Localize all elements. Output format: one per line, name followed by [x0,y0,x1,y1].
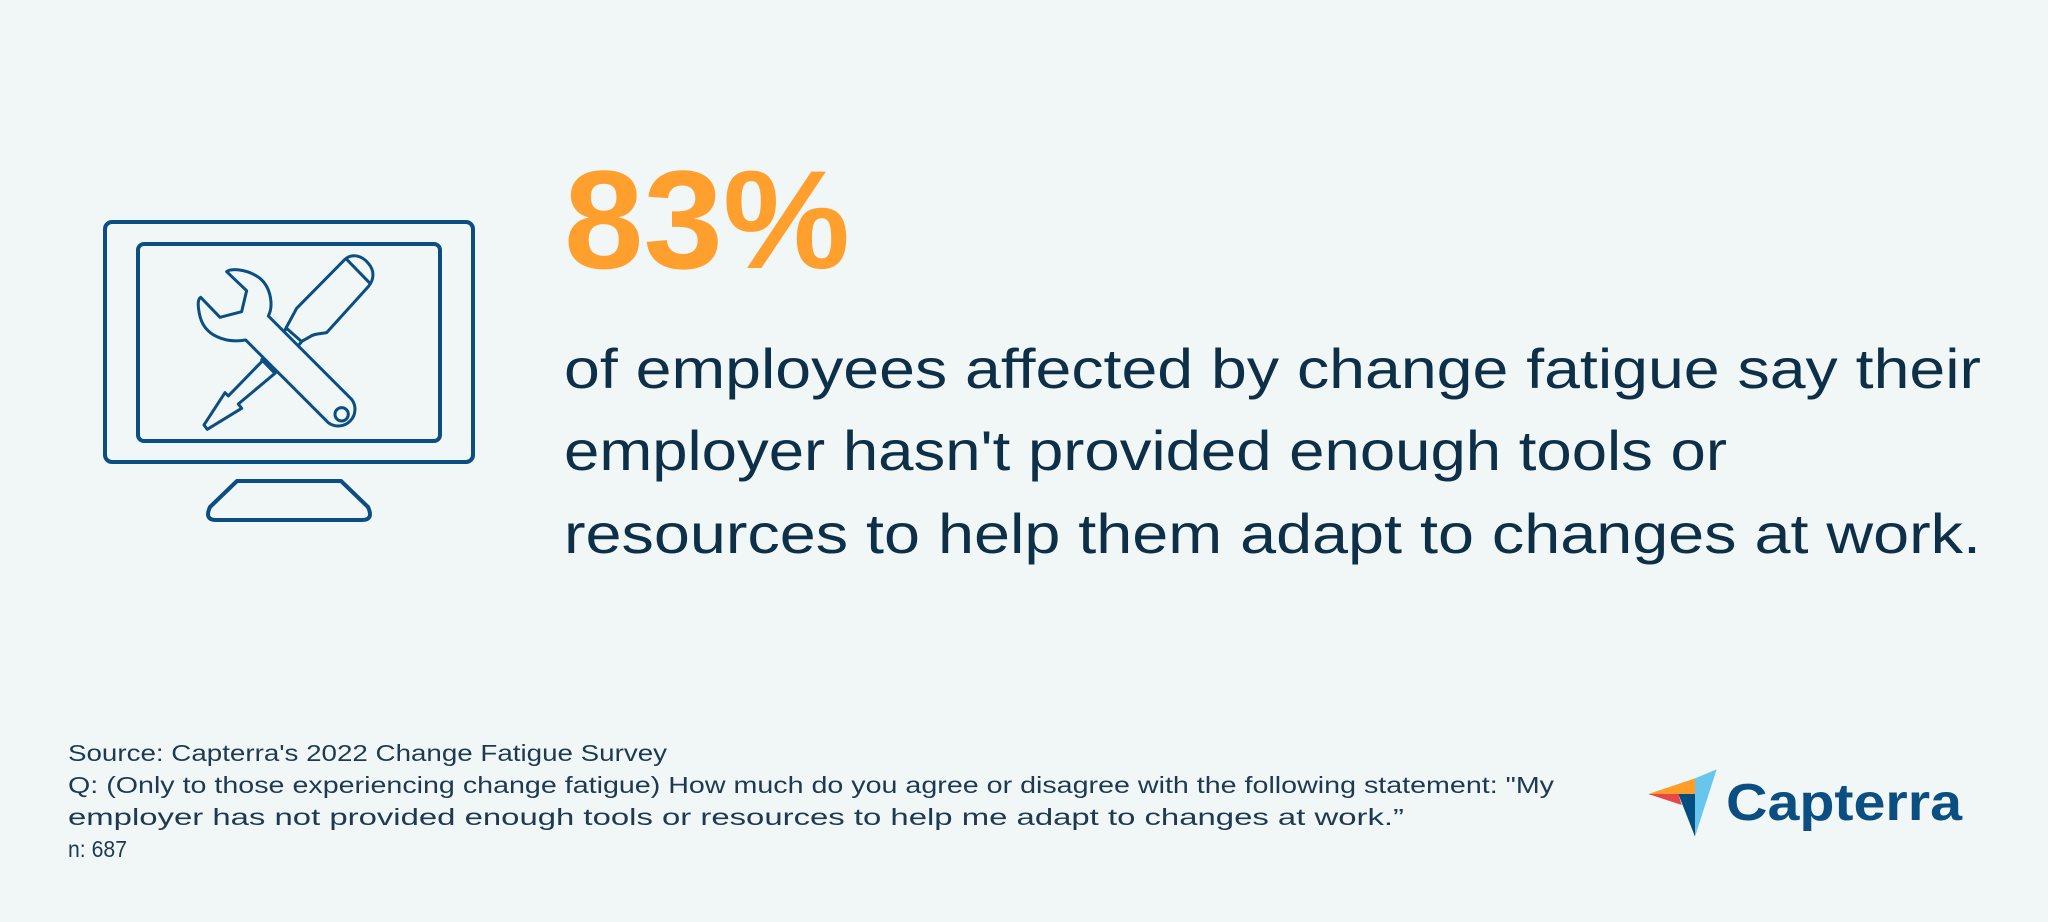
monitor stand [208,481,370,520]
source notes: Q: (Only to those experiencing change fatigue) How much do you agree or disagree with the following statement: "My [68,772,1555,798]
statement text: employer hasn't provided enough tools or [564,419,1727,482]
logo wordmark: Capterra [1726,774,1963,832]
monitor outer frame [105,222,473,462]
icon: monitor with tools [105,222,473,520]
wrench [198,270,355,426]
statement text: of employees affected by change fatigue say their [564,337,1981,400]
headline number: 83% [564,141,850,298]
source notes: employer has not provided enough tools or resources to help me adapt to changes at work.” [68,804,1404,830]
logo mark [1648,769,1717,837]
logo: Capterra [1648,769,1963,837]
source notes: n: 687 [68,836,127,862]
source notes: Source: Capterra's 2022 Change Fatigue Survey [68,740,668,766]
statement text: resources to help them adapt to changes at work. [564,502,1981,565]
screwdriver [204,256,373,429]
monitor screen [138,244,440,441]
tools [198,256,373,429]
statement text [564,337,1981,565]
source notes [68,740,1555,862]
